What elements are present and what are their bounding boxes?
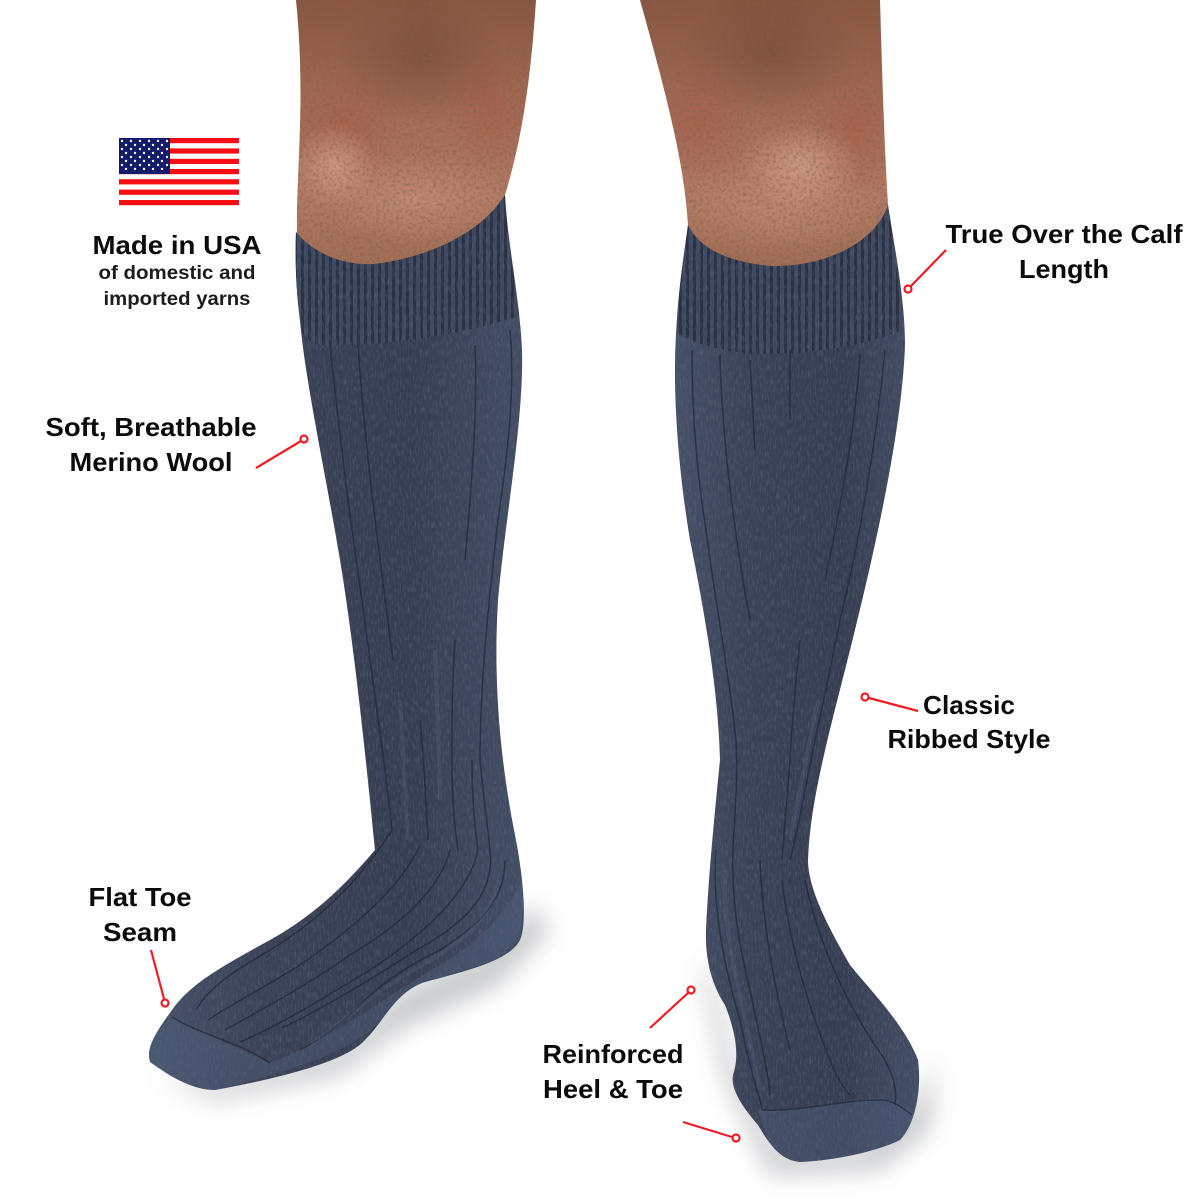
callout: true over the calf length: True Over the Calf xyxy=(946,219,1183,249)
callout: made in usa: Made in USA xyxy=(92,230,262,260)
right toe seam xyxy=(762,1100,912,1115)
callout: reinforced heel and toe: Reinforced xyxy=(542,1039,684,1069)
callout: flat toe seam xyxy=(88,882,192,1006)
left sock xyxy=(140,190,540,1100)
right knee skin xyxy=(640,0,900,280)
left knee skin xyxy=(296,0,536,264)
shadows under feet xyxy=(155,905,935,1175)
callout: flat toe seam: Flat Toe xyxy=(88,882,192,912)
callout: made in usa xyxy=(92,230,262,310)
left leg xyxy=(140,0,540,1100)
left sock ribs xyxy=(140,190,540,1100)
callout: made in usa: imported yarns xyxy=(104,289,250,310)
callout: classic ribbed style: Ribbed Style xyxy=(888,724,1050,754)
callout: reinforced heel and toe xyxy=(542,986,740,1142)
callout: true over the calf length xyxy=(904,219,1183,292)
callout: soft breathable merino wool: Merino Wool xyxy=(70,447,232,477)
callout: true over the calf length: Length xyxy=(1019,254,1109,284)
left sock cuff xyxy=(296,195,519,346)
right sock xyxy=(670,200,930,1170)
callout: classic ribbed style xyxy=(862,690,1050,754)
callout: soft breathable merino wool xyxy=(46,412,308,477)
icon: american flag xyxy=(119,138,239,206)
right leg xyxy=(640,0,930,1170)
callout: made in usa: of domestic and xyxy=(98,263,256,284)
right sock cuff xyxy=(677,205,902,354)
callout: soft breathable merino wool: Soft, Breathable xyxy=(46,412,256,442)
left toe seam xyxy=(172,1017,270,1063)
callout: flat toe seam: Seam xyxy=(103,917,177,947)
callout: reinforced heel and toe: Heel & Toe xyxy=(543,1074,683,1104)
callout: classic ribbed style: Classic xyxy=(923,690,1015,720)
right sock ribs xyxy=(670,200,930,1170)
